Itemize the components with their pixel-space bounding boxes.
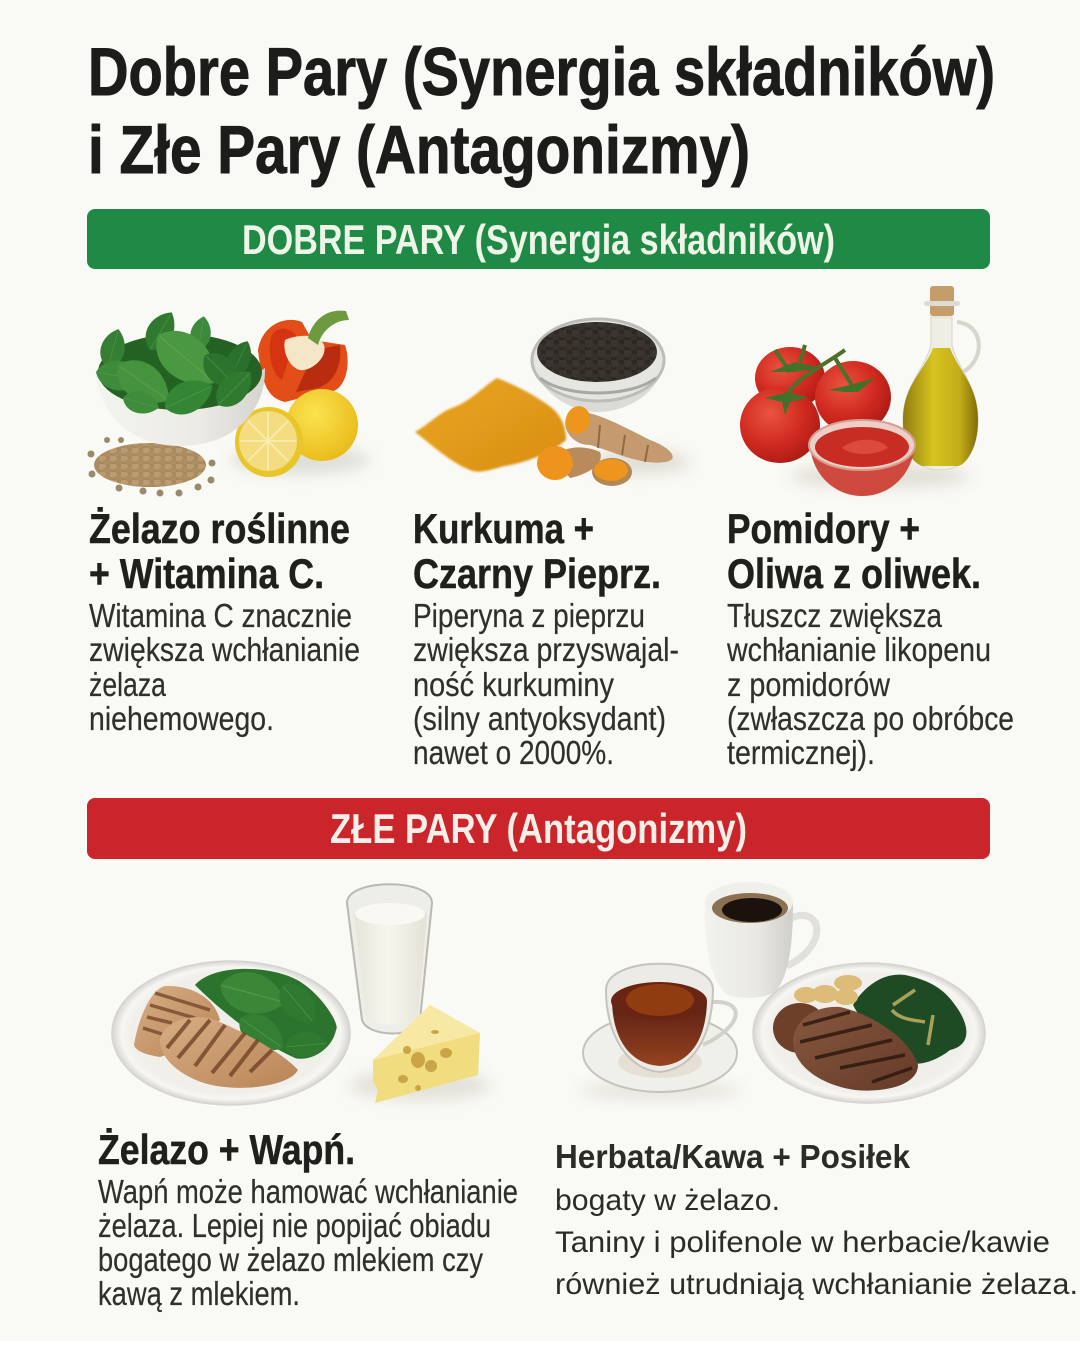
text: iron + calcium: żelaza. Lepiej nie popijać obiadu xyxy=(98,1207,491,1244)
turmeric roots xyxy=(537,403,673,486)
bowl xyxy=(93,306,265,446)
steaks xyxy=(773,1003,918,1091)
text: tomatoes + olive oil: (zwłaszcza po obróbce xyxy=(727,700,1014,737)
potatoes xyxy=(794,975,862,1005)
text: iron + vitamin C: + Witamina C. xyxy=(89,550,324,597)
text: tea/coffee + meal: bogaty w żelazo. xyxy=(555,1184,780,1217)
pepper xyxy=(258,311,349,402)
text: iron + calcium xyxy=(98,1126,518,1312)
steak plate xyxy=(753,963,985,1103)
text: turmeric + black pepper: Czarny Pieprz. xyxy=(413,550,661,597)
text: tomatoes + olive oil: wchłanianie likopenu xyxy=(726,631,991,668)
text: iron + vitamin C xyxy=(89,505,360,737)
lemon xyxy=(235,389,358,477)
text: tomatoes + olive oil: z pomidorów xyxy=(727,666,890,703)
text: turmeric + black pepper: ność kurkuminy xyxy=(413,666,614,703)
cheese xyxy=(373,1005,480,1103)
pepper bowl xyxy=(532,319,664,412)
text: turmeric + black pepper: zwiększa przyswajal- xyxy=(413,631,679,668)
text: tea/coffee + meal: Herbata/Kawa + Posiłek xyxy=(555,1138,911,1175)
text: tomatoes + olive oil: termicznej). xyxy=(727,734,875,771)
text: turmeric + black pepper: Piperyna z pieprzu xyxy=(413,597,645,634)
banner: bad pairs: ZŁE PARY (Antagonizmy) xyxy=(330,805,747,852)
text: iron + vitamin C: Żelazo roślinne xyxy=(89,505,350,552)
illustration: tomatoes, sauce and olive oil xyxy=(740,286,979,496)
plate xyxy=(112,961,350,1105)
spinach on plate xyxy=(195,965,337,1061)
text: iron + calcium: Wapń może hamować wchłanianie xyxy=(98,1173,518,1210)
text: tea/coffee + meal: również utrudniają wchłanianie żelaza. xyxy=(555,1268,1078,1301)
text: turmeric + black pepper xyxy=(413,505,679,771)
tea cup xyxy=(583,964,737,1092)
chicken xyxy=(134,986,298,1088)
illustration: spinach, pepper, lemon, lentils xyxy=(88,306,370,496)
tomato sauce bowl xyxy=(809,420,915,496)
text: iron + calcium: bogatego w żelazo mlekiem czy xyxy=(98,1241,483,1278)
text: turmeric + black pepper: (silny antyoksydant) xyxy=(413,700,666,737)
text: tomatoes + olive oil: Oliwa z oliwek. xyxy=(727,550,981,597)
title xyxy=(88,34,995,188)
banner: good pairs: DOBRE PARY (Synergia składników) xyxy=(242,216,835,263)
banner: good pairs xyxy=(87,209,990,269)
text: turmeric + black pepper: nawet o 2000%. xyxy=(413,734,614,771)
text: iron + vitamin C: zwiększa wchłanianie xyxy=(89,631,360,668)
text: tomatoes + olive oil xyxy=(726,505,1014,771)
text: iron + calcium: kawą z mlekiem. xyxy=(98,1275,300,1312)
text: turmeric + black pepper: Kurkuma + xyxy=(413,505,594,552)
text: iron + vitamin C: niehemowego. xyxy=(89,700,274,737)
olive oil bottle xyxy=(903,286,979,470)
greens xyxy=(853,975,966,1064)
title: i Złe Pary (Antagonizmy) xyxy=(88,112,750,188)
text: iron + vitamin C: Witamina C znacznie xyxy=(89,597,352,634)
text: iron + calcium: Żelazo + Wapń. xyxy=(98,1126,355,1173)
tomatoes xyxy=(740,345,891,463)
text: tomatoes + olive oil: Tłuszcz zwiększa xyxy=(727,597,943,634)
text: iron + vitamin C: żelaza xyxy=(89,666,167,703)
coffee mug xyxy=(705,882,817,998)
lentils xyxy=(88,437,216,496)
illustration: chicken, spinach, milk and cheese xyxy=(112,884,490,1105)
text: tea/coffee + meal: Taniny i polifenole w herbacie/kawie xyxy=(555,1226,1050,1259)
text: tomatoes + olive oil: Pomidory + xyxy=(727,505,920,552)
turmeric powder xyxy=(415,378,566,472)
banner: bad pairs xyxy=(87,798,990,859)
illustration: tea, coffee and steak xyxy=(580,882,985,1103)
milk glass xyxy=(347,884,432,1034)
text: tea/coffee + meal xyxy=(555,1138,1078,1301)
illustration: turmeric and black pepper xyxy=(415,319,690,486)
